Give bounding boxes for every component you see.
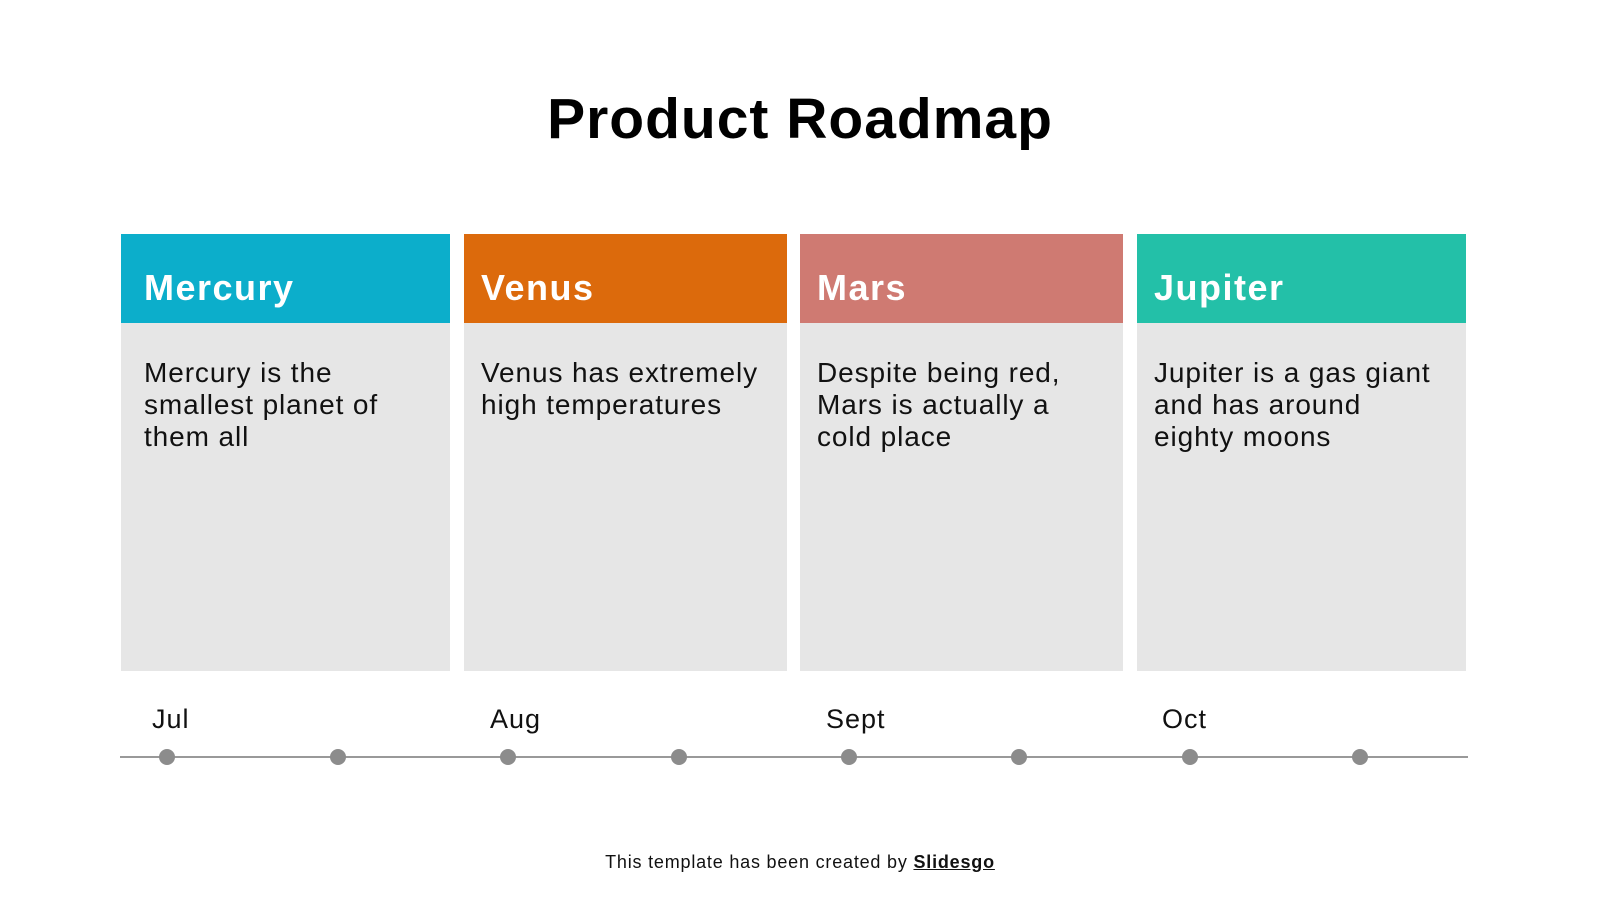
- text: Mercury: them all: [144, 421, 249, 452]
- header: Mercury: Mercury: [144, 267, 295, 308]
- timeline: [120, 704, 1468, 765]
- title: Product Roadmap: [547, 87, 1053, 151]
- text: Mars: cold place: [817, 421, 952, 452]
- header: Mars: [800, 234, 1123, 323]
- header: Venus: Venus: [481, 267, 595, 308]
- header: Jupiter: Jupiter: [1154, 267, 1285, 308]
- text: Mercury: Mercury is the: [144, 357, 332, 388]
- text: Mercury: smallest planet of: [144, 389, 378, 420]
- panel: Mercury: [121, 234, 450, 671]
- label: Jul: Jul: [152, 704, 190, 734]
- label: Aug: Aug: [490, 704, 541, 734]
- text: Jupiter: and has around: [1154, 389, 1361, 420]
- header: Venus: [464, 234, 787, 323]
- panel: Jupiter: [1137, 234, 1466, 671]
- text: Mars: Mars is actually a: [817, 389, 1050, 420]
- text: Mars: Despite being red,: [817, 357, 1060, 388]
- text: Venus: high temperatures: [481, 389, 722, 420]
- text: Venus: Venus has extremely: [481, 357, 758, 388]
- text: Mercury: [121, 323, 450, 671]
- text: Jupiter: eighty moons: [1154, 421, 1331, 452]
- text: Mars: [800, 323, 1123, 671]
- text: Jupiter: Jupiter is a gas giant: [1154, 357, 1431, 388]
- footer credit: This template has been created by Slidesgo: [605, 852, 995, 872]
- text: Venus: [464, 323, 787, 671]
- label: Sept: Sept: [826, 704, 886, 734]
- header: Mars: Mars: [817, 267, 907, 308]
- label: Oct: Oct: [1162, 704, 1207, 734]
- text: Jupiter: [1137, 323, 1466, 671]
- panel: Venus: [464, 234, 787, 671]
- header: Jupiter: [1137, 234, 1466, 323]
- header: Mercury: [121, 234, 450, 323]
- panel: Mars: [800, 234, 1123, 671]
